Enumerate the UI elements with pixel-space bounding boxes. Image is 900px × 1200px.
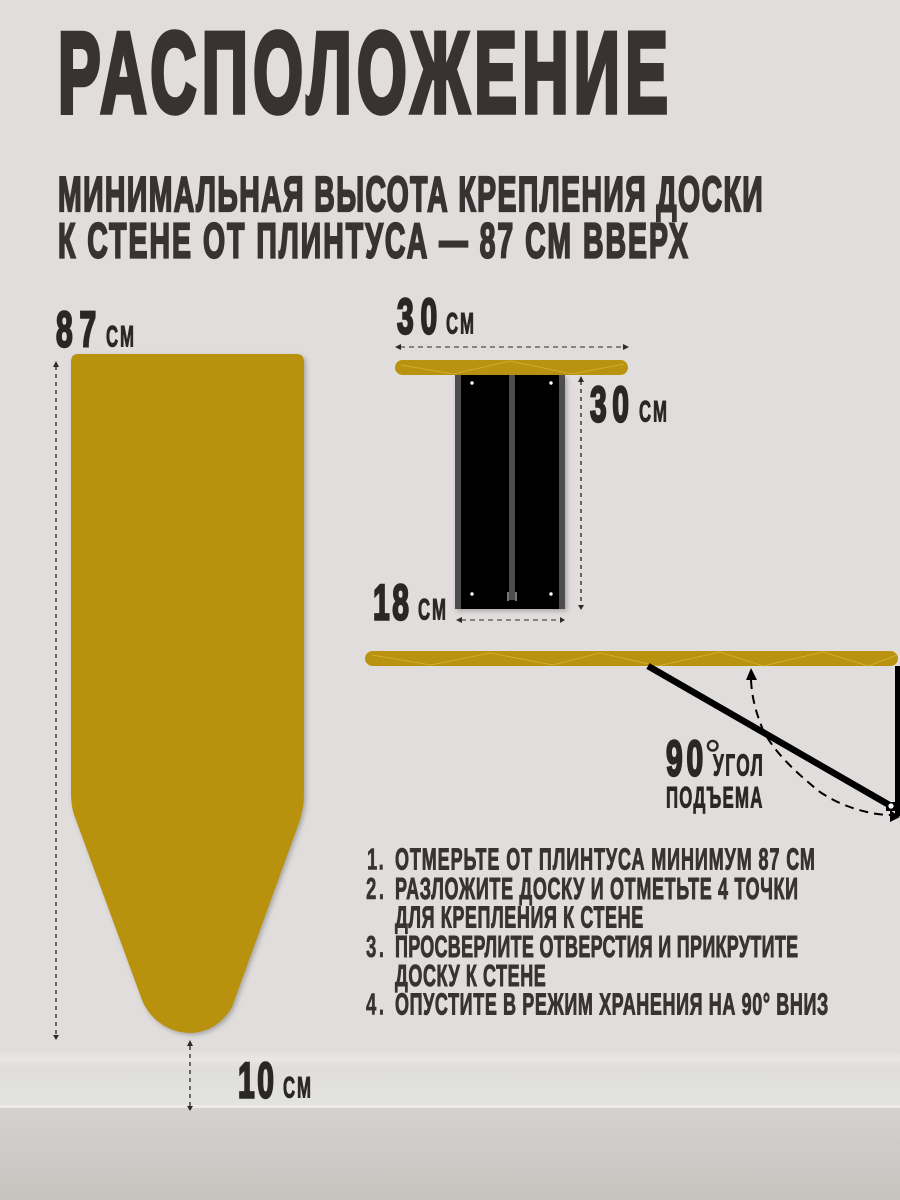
instruction list: 1.: [367, 843, 384, 877]
dimension arrow: 30 cm width: [395, 344, 629, 350]
instruction list: ОПУСТИТЕ В РЕЖИМ ХРАНЕНИЯ НА 90° ВНИЗ: [395, 988, 828, 1022]
ironing board top view: [71, 354, 304, 1033]
subtitle: [58, 168, 763, 269]
label: 30 cm depth: [590, 377, 667, 432]
label: 90 degree lift angle: [666, 731, 763, 815]
dimension arrow: 18 cm width: [456, 617, 565, 623]
label: 30 cm width: СМ: [446, 308, 474, 341]
folded board edge view: [395, 360, 628, 375]
label: 30 cm width: 30: [397, 289, 437, 344]
label: 10 cm: 10: [238, 1053, 274, 1108]
label: 30 cm depth: 30: [590, 377, 629, 432]
instruction list: ОТМЕРЬТЕ ОТ ПЛИНТУСА МИНИМУМ 87 СМ: [395, 843, 815, 877]
label: 18 cm: 18: [373, 575, 409, 630]
subtitle: МИНИМАЛЬНАЯ ВЫСОТА КРЕПЛЕНИЯ ДОСКИ: [58, 168, 763, 222]
wall bracket panel: [455, 375, 565, 609]
instruction list: 3.: [366, 930, 384, 964]
label: 90 degree lift angle: ПОДЪЕМА: [666, 782, 762, 815]
instruction list: ПРОСВЕРЛИТЕ ОТВЕРСТИЯ И ПРИКРУТИТЕ: [395, 930, 798, 964]
dimension arrow: 30 cm depth: [578, 376, 584, 610]
label: 10 cm: СМ: [283, 1072, 311, 1105]
instruction list: 2.: [366, 872, 384, 906]
arrow: 90 degree rotation arc: [746, 668, 900, 822]
instruction list: ДЛЯ КРЕПЛЕНИЯ К СТЕНЕ: [395, 901, 643, 935]
label: 30 cm depth: СМ: [639, 396, 667, 429]
label: 87 cm: 87: [56, 302, 96, 357]
instruction list: 4.: [366, 988, 384, 1022]
instruction list: [366, 843, 828, 1022]
label: 30 cm width: [397, 289, 474, 344]
label: 87 cm: СМ: [106, 321, 134, 354]
subtitle: К СТЕНЕ ОТ ПЛИНТУСА — 87 СМ ВВЕРХ: [58, 215, 688, 269]
skirting board and floor: [0, 1052, 900, 1200]
instruction list: ДОСКУ К СТЕНЕ: [395, 959, 546, 993]
label: 90 degree lift angle: УГОЛ: [713, 748, 763, 783]
dimension arrow: 10 cm gap: [187, 1040, 193, 1111]
instruction list: РАЗЛОЖИТЕ ДОСКУ И ОТМЕТЬТЕ 4 ТОЧКИ: [395, 872, 798, 906]
title: РАСПОЛОЖЕНИЕ: [58, 8, 668, 137]
label: 90 degree lift angle: 90: [666, 731, 703, 786]
label: 18 cm: [373, 575, 446, 630]
label: 87 cm: [56, 302, 134, 357]
side view of board with brace: [365, 651, 900, 816]
label: 18 cm: СМ: [418, 594, 446, 627]
label: 10 cm: [238, 1053, 311, 1108]
dimension arrow: 87 cm height: [53, 361, 59, 1040]
